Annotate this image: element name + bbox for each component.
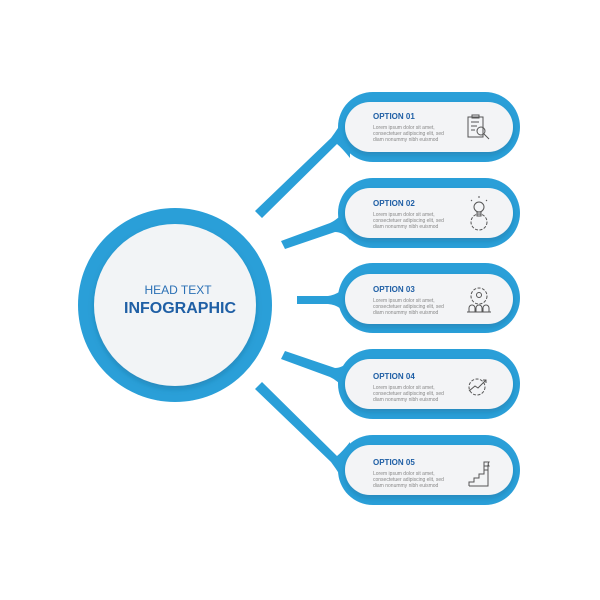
option 5 xyxy=(338,435,520,505)
option 1: Lorem ipsum dolor sit amet, xyxy=(373,125,435,131)
option 1 xyxy=(338,92,520,162)
option 1: OPTION 01 xyxy=(373,112,415,121)
option 2: diam nonummy nibh euismod xyxy=(373,224,439,230)
option 4 xyxy=(338,349,520,419)
option 2: Lorem ipsum dolor sit amet, xyxy=(373,212,435,218)
option 2 xyxy=(338,178,520,248)
icon: stairs flag xyxy=(469,462,489,486)
icon: gear growth xyxy=(469,379,486,395)
option 3: diam nonummy nibh euismod xyxy=(373,310,439,316)
option 3: consectetuer adipiscing elit, sed xyxy=(373,304,444,310)
option 2: OPTION 02 xyxy=(373,199,415,208)
option 3: OPTION 03 xyxy=(373,285,415,294)
option 4: diam nonummy nibh euismod xyxy=(373,397,439,403)
option 4: OPTION 04 xyxy=(373,372,415,381)
option 3 xyxy=(338,263,520,333)
option 1: diam nonummy nibh euismod xyxy=(373,137,439,143)
infographic title: INFOGRAPHIC xyxy=(124,300,236,317)
option 5: Lorem ipsum dolor sit amet, xyxy=(373,471,435,477)
option 5: consectetuer adipiscing elit, sed xyxy=(373,477,444,483)
option 4: Lorem ipsum dolor sit amet, xyxy=(373,385,435,391)
option 5: OPTION 05 xyxy=(373,458,415,467)
head text: HEAD TEXT xyxy=(144,283,212,297)
option 5: diam nonummy nibh euismod xyxy=(373,483,439,489)
icon: clipboard xyxy=(468,115,489,139)
option 3: Lorem ipsum dolor sit amet, xyxy=(373,298,435,304)
option 1: consectetuer adipiscing elit, sed xyxy=(373,131,444,137)
stems xyxy=(255,108,350,492)
icon: bulb gear xyxy=(471,196,487,230)
icon: team gear xyxy=(467,288,491,312)
option 4: consectetuer adipiscing elit, sed xyxy=(373,391,444,397)
option 2: consectetuer adipiscing elit, sed xyxy=(373,218,444,224)
central circle xyxy=(78,208,272,402)
